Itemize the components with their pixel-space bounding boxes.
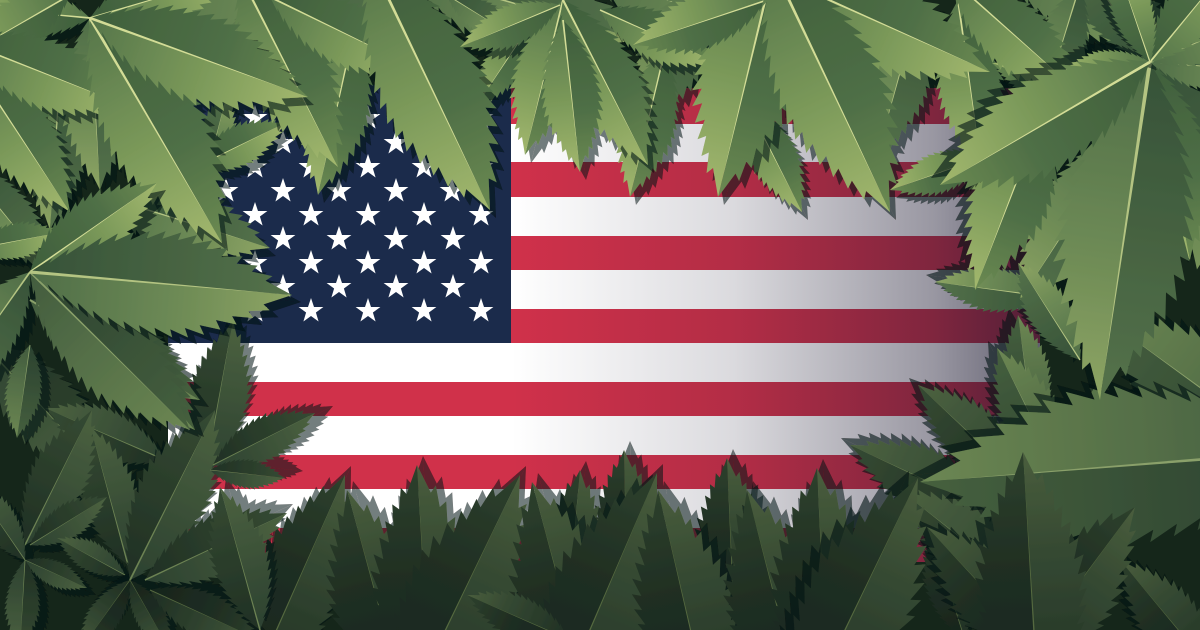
leaves: top right cluster [720,0,1192,236]
canton stars [214,105,493,322]
leaves: mid left cluster [0,240,223,462]
leaves: bottom left back cluster [0,314,175,630]
leaves: bottom front layer [207,450,883,630]
leaves: right hub front layer [915,0,1200,227]
flag shading fade [511,88,1040,562]
leaves: top left front layer [0,0,324,269]
leaves: right middle back cluster [836,275,1200,628]
leaves: top center back layer [202,0,824,223]
leaves: top center front layer [320,0,828,234]
small leaflets casting long shadows [203,393,325,493]
leaves: right hub back layer [932,34,1200,410]
leaves: bottom right cluster [742,370,1200,630]
leaves: left hub cluster [0,158,297,347]
leaves: lower left front cluster [66,314,300,630]
american flag [168,85,1040,562]
leaves: top left back layer [0,0,436,288]
flag stripes [168,88,1040,562]
flag canton [168,85,511,343]
leaves: bottom back layer [531,449,1011,630]
